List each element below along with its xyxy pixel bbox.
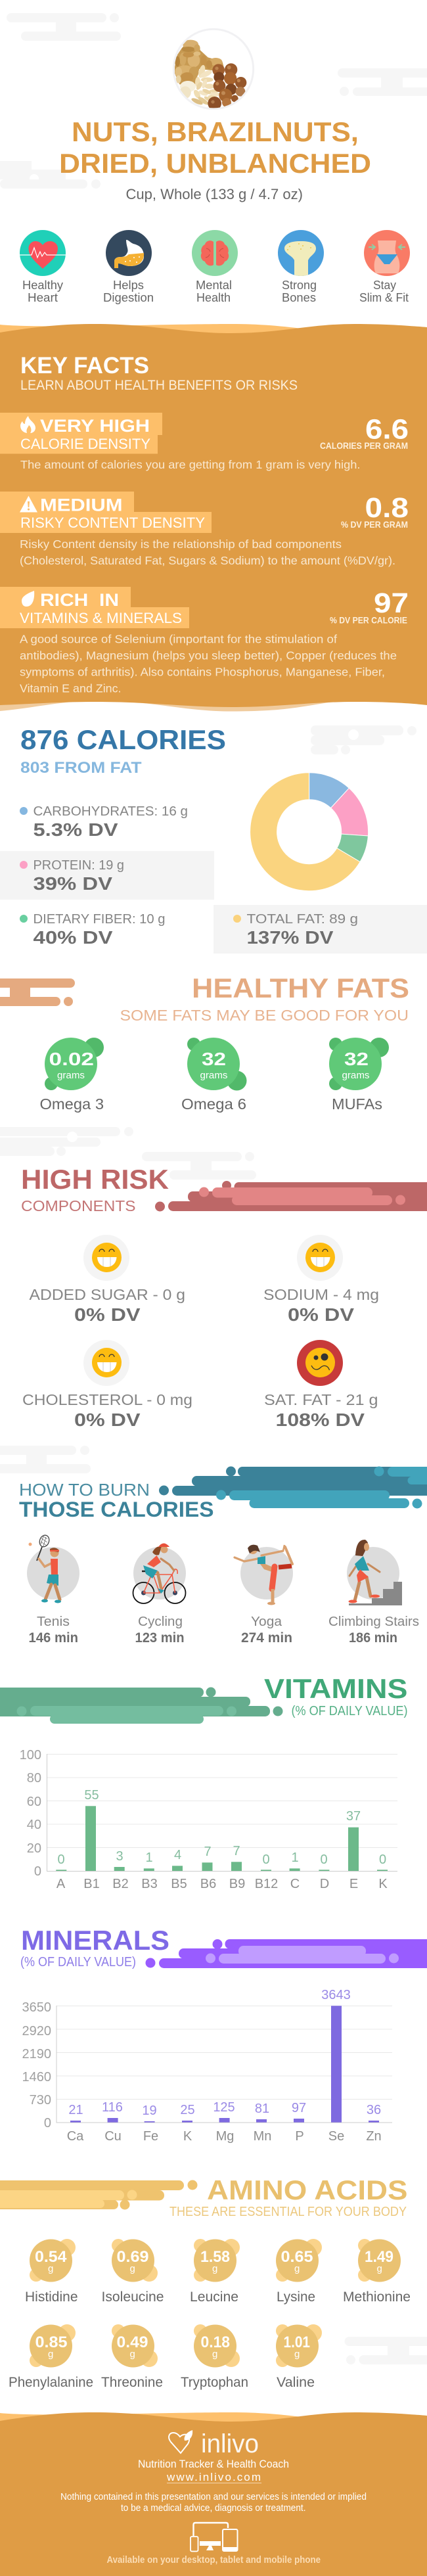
badge: histidine: Histidine bbox=[25, 2289, 78, 2305]
bar chart: minerals: 21 bbox=[68, 2103, 83, 2117]
label: rich in: RICH IN bbox=[40, 590, 119, 610]
label: slim and fit: Slim & Fit bbox=[359, 291, 409, 304]
bar chart: vitamins: 1 bbox=[291, 1851, 299, 1865]
badge: methionine: Methionine bbox=[343, 2289, 411, 2305]
badge: leucine bbox=[190, 2239, 240, 2305]
bar chart: minerals: Ca bbox=[67, 2129, 84, 2144]
badge: phenylalanine bbox=[9, 2324, 93, 2390]
donut chart bbox=[250, 773, 369, 891]
disclaimer: Nothing contained in this presentation and our services is intended or implied bbox=[60, 2492, 367, 2502]
badge: phenylalanine: 0.85 bbox=[35, 2334, 67, 2351]
bar chart: vitamins: C bbox=[290, 1877, 300, 1891]
bar chart: vitamins: 0 bbox=[262, 1852, 270, 1867]
bar chart: vitamins: 0 bbox=[379, 1852, 386, 1867]
title: NUTS, BRAZILNUTS, bbox=[72, 116, 359, 147]
subheading: LEARN ABOUT HEALTH BENEFITS OR RISKS bbox=[20, 378, 298, 393]
panel: vitamins bbox=[0, 1673, 407, 1891]
label: helps digestion: Helps bbox=[113, 279, 144, 292]
bar chart: vitamins: E bbox=[349, 1877, 358, 1891]
bar chart: minerals: Mn bbox=[254, 2129, 271, 2144]
subheading: SOME FATS MAY BE GOOD FOR YOU bbox=[120, 1007, 409, 1024]
subheading: (% OF DAILY VALUE) bbox=[20, 1955, 136, 1969]
logo wordmark: inlivo bbox=[201, 2429, 259, 2458]
fact: calorie density bbox=[0, 413, 409, 471]
bar chart: vitamins: 7 bbox=[204, 1845, 212, 1859]
bar chart: minerals: 2190 bbox=[22, 2047, 51, 2061]
bar chart: vitamins: D bbox=[320, 1877, 329, 1891]
badge: methionine: g bbox=[377, 2263, 382, 2274]
label: helps digestion: Digestion bbox=[103, 291, 154, 304]
subheading: THESE ARE ESSENTIAL FOR YOUR BODY bbox=[169, 2205, 407, 2219]
item: cholesterol: CHOLESTEROL - 0 mg bbox=[22, 1391, 192, 1408]
badge: mufas: 32 bbox=[344, 1049, 369, 1069]
bar chart: minerals: Mg bbox=[216, 2129, 234, 2144]
exercise: cycling: Cycling bbox=[138, 1615, 183, 1629]
bar chart: vitamins: 20 bbox=[27, 1841, 41, 1856]
tagline: Nutrition Tracker & Health Coach bbox=[138, 2458, 289, 2470]
exercise: yoga: Yoga bbox=[251, 1615, 282, 1629]
background cloud: top left bbox=[7, 13, 121, 41]
heading: healthy fats: HEALTHY FATS bbox=[192, 973, 409, 1003]
logo: inlivo heart bbox=[169, 2429, 259, 2458]
background clouds: above high risk bbox=[0, 1127, 256, 1180]
background cloud bbox=[344, 2337, 427, 2364]
panel: footer bbox=[0, 2412, 427, 2576]
bar chart: vitamins: B1 bbox=[83, 1877, 100, 1891]
fact: rich in vitamins and minerals bbox=[0, 587, 409, 695]
icon: flame bbox=[20, 416, 35, 433]
description: Risky Content density is the relationship of bad components bbox=[20, 538, 342, 551]
badge: valine: 1.01 bbox=[284, 2334, 310, 2351]
badge: omega 3: 0.02 bbox=[49, 1049, 94, 1069]
background cloud: beside title bbox=[0, 161, 101, 189]
exercise: yoga bbox=[235, 1545, 293, 1645]
badge: omega 6: grams bbox=[200, 1070, 227, 1081]
badge: leucine: Leucine bbox=[190, 2289, 238, 2305]
panel: minerals bbox=[20, 1925, 427, 2144]
description: The amount of calories you are getting from 1 gram is very high. bbox=[20, 458, 360, 471]
bar chart: vitamins: 100 bbox=[20, 1748, 41, 1762]
exercise: tennis bbox=[27, 1534, 79, 1645]
legend: carbohydrates bbox=[20, 804, 188, 840]
title bbox=[59, 116, 371, 179]
decorative blob bbox=[159, 1467, 427, 1509]
bar chart: minerals: 2920 bbox=[22, 2024, 51, 2038]
panel: high risk components bbox=[21, 1164, 427, 1430]
value: 0.8: 0.8 bbox=[365, 492, 409, 524]
description: Vitamin E and Zinc. bbox=[20, 682, 121, 695]
bar chart: minerals: 0 bbox=[44, 2116, 51, 2130]
description: A good source of Selenium (important for the stimulation of bbox=[20, 632, 337, 645]
icon: warning triangle bbox=[20, 495, 37, 513]
bar chart: vitamins bbox=[20, 1748, 397, 1891]
bar chart: minerals: 25 bbox=[180, 2103, 195, 2117]
badge: leucine: 1.58 bbox=[200, 2248, 230, 2266]
decorative blob bbox=[146, 1939, 427, 1968]
bar chart: minerals: 36 bbox=[367, 2103, 381, 2117]
item: added sugar: ADDED SUGAR - 0 g bbox=[29, 1286, 185, 1303]
title: DRIED, UNBLANCHED bbox=[59, 148, 371, 179]
legend: carbohydrates: 5.3% DV bbox=[33, 819, 118, 840]
exercise: tennis: 146 min bbox=[29, 1630, 78, 1645]
icon: mental health brain bbox=[192, 230, 238, 276]
item: sodium: SODIUM - 4 mg bbox=[263, 1286, 379, 1303]
value: 97: 97 bbox=[374, 587, 409, 619]
background band: protein bbox=[0, 851, 214, 900]
heading: amino acids: AMINO ACIDS bbox=[207, 2174, 407, 2205]
bar chart: vitamins: B12 bbox=[255, 1877, 278, 1891]
legend: protein: PROTEIN: 19 g bbox=[33, 858, 124, 873]
badge: valine bbox=[276, 2324, 322, 2390]
subheading: components: COMPONENTS bbox=[21, 1197, 135, 1214]
exercise: climbing stairs: Climbing Stairs bbox=[328, 1615, 419, 1629]
badge: tryptophan: g bbox=[212, 2349, 217, 2360]
bar chart: vitamins: B5 bbox=[171, 1877, 187, 1891]
legend: dietary fiber: 40% DV bbox=[33, 927, 113, 948]
label: slim and fit: Stay bbox=[373, 279, 396, 292]
badge: omega 3: Omega 3 bbox=[39, 1095, 104, 1113]
unit: dv per gram: % DV PER GRAM bbox=[341, 520, 408, 530]
description bbox=[20, 632, 397, 695]
badge: methionine bbox=[343, 2239, 411, 2305]
description: antibodies), Magnesium (helps you sleep better), Copper (reduces the bbox=[20, 649, 397, 662]
bar chart: minerals: 97 bbox=[292, 2101, 306, 2115]
website link: www.inlivo.com bbox=[166, 2471, 261, 2483]
item: saturated fat bbox=[264, 1340, 378, 1430]
label: healthy heart: Heart bbox=[28, 291, 58, 304]
value: 6.6: 6.6 bbox=[365, 414, 409, 446]
background band: total fat bbox=[214, 905, 427, 954]
bar chart: minerals: K bbox=[183, 2129, 192, 2144]
label: calorie density: CALORIE DENSITY bbox=[20, 436, 150, 452]
badge: isoleucine: Isoleucine bbox=[101, 2289, 164, 2305]
bar chart: vitamins: 4 bbox=[174, 1848, 181, 1862]
badge: valine: Valine bbox=[277, 2375, 315, 2390]
legend: dietary fiber bbox=[20, 912, 165, 948]
badge: mufas: MUFAs bbox=[332, 1095, 382, 1113]
decorative blob bbox=[0, 2180, 197, 2209]
item: cholesterol bbox=[22, 1340, 192, 1430]
bar chart: vitamins: B9 bbox=[229, 1877, 245, 1891]
bar chart: vitamins: B3 bbox=[141, 1877, 158, 1891]
bar chart: minerals: 81 bbox=[255, 2102, 269, 2116]
bar chart: minerals: Fe bbox=[143, 2129, 158, 2144]
unit: dv per calorie: % DV PER CALORIE bbox=[330, 615, 407, 626]
badge: threonine: Threonine bbox=[101, 2375, 163, 2390]
disclaimer: to be a medical advice, diagnosis or treatment. bbox=[121, 2503, 306, 2514]
legend: protein: 39% DV bbox=[33, 873, 112, 894]
subheading: from fat: 803 FROM FAT bbox=[20, 759, 142, 777]
unit: calories per gram: CALORIES PER GRAM bbox=[320, 441, 408, 451]
legend: carbohydrates: CARBOHYDRATES: 16 g bbox=[33, 804, 188, 819]
badge: threonine: g bbox=[130, 2349, 135, 2360]
panel: healthy fats bbox=[0, 973, 409, 1113]
legend: total fat bbox=[233, 912, 358, 948]
bar chart: minerals: 116 bbox=[102, 2100, 123, 2115]
badge: histidine: g bbox=[48, 2263, 53, 2274]
bar chart: minerals: 3643 bbox=[321, 1988, 351, 2002]
badge: tryptophan bbox=[181, 2324, 248, 2390]
label: helps digestion bbox=[103, 279, 154, 304]
heading: minerals: MINERALS bbox=[21, 1925, 169, 1956]
badge: lysine: 0.65 bbox=[281, 2248, 313, 2266]
label: healthy heart: Healthy bbox=[22, 279, 63, 292]
badge: mufas bbox=[329, 1038, 389, 1113]
heading: key facts: KEY FACTS bbox=[20, 353, 149, 379]
badge: threonine: 0.49 bbox=[117, 2334, 148, 2351]
heading bbox=[19, 1480, 214, 1521]
decorative blob bbox=[0, 1688, 282, 1724]
badge: omega 3: grams bbox=[57, 1070, 85, 1081]
badge: lysine: Lysine bbox=[277, 2289, 315, 2305]
icon: digestion stomach bbox=[106, 230, 152, 276]
description: (Cholesterol, Saturated Fat, Sugars & Sodium) to the amount (%DV/gr). bbox=[20, 554, 395, 567]
badge: phenylalanine: g bbox=[48, 2349, 53, 2360]
background cloud: above burn section bbox=[0, 1446, 91, 1473]
badge: omega 3 bbox=[39, 1038, 104, 1113]
description bbox=[20, 538, 395, 567]
badge: omega 6: Omega 6 bbox=[181, 1095, 246, 1113]
label: mental health: Health bbox=[196, 291, 231, 304]
badge: histidine bbox=[25, 2239, 78, 2305]
health benefit icons row bbox=[20, 230, 410, 304]
panel: amino acids bbox=[0, 2174, 427, 2390]
item: added sugar bbox=[29, 1235, 185, 1325]
bar chart: vitamins: 1 bbox=[145, 1851, 153, 1865]
bar chart: minerals: P bbox=[295, 2129, 304, 2144]
availability note: Available on your desktop, tablet and mobile phone bbox=[106, 2554, 321, 2565]
badge: histidine: 0.54 bbox=[35, 2248, 67, 2266]
label: strong bones: Strong bbox=[282, 279, 317, 292]
bar chart: vitamins: B2 bbox=[112, 1877, 129, 1891]
item: added sugar: 0% DV bbox=[74, 1304, 141, 1325]
bar chart: vitamins: 0 bbox=[34, 1864, 41, 1879]
badge: omega 6: 32 bbox=[202, 1049, 226, 1069]
heading: vitamins: VITAMINS bbox=[264, 1673, 407, 1704]
badge: lysine: g bbox=[294, 2263, 300, 2274]
badge: lysine bbox=[276, 2239, 322, 2305]
bar chart: minerals: 125 bbox=[213, 2100, 235, 2115]
serving size subtitle: Cup, Whole (133 g / 4.7 oz) bbox=[126, 186, 303, 202]
badge: threonine bbox=[101, 2324, 163, 2390]
badge: isoleucine: g bbox=[130, 2263, 135, 2274]
bar chart: vitamins: 7 bbox=[233, 1844, 240, 1858]
bar chart: vitamins: 0 bbox=[57, 1852, 65, 1867]
badge: methionine: 1.49 bbox=[365, 2248, 393, 2266]
bar chart: minerals bbox=[22, 1988, 392, 2144]
badge: isoleucine: 0.69 bbox=[117, 2248, 148, 2266]
background cloud: top right bbox=[338, 68, 427, 96]
bar chart: minerals: 1460 bbox=[22, 2070, 51, 2084]
legend: protein bbox=[20, 858, 124, 894]
decorative blob bbox=[155, 1181, 427, 1212]
item: sodium: 0% DV bbox=[288, 1304, 354, 1325]
panel: calories bbox=[0, 724, 427, 954]
item: saturated fat: SAT. FAT - 21 g bbox=[264, 1391, 378, 1408]
bar chart: vitamins: K bbox=[378, 1877, 388, 1891]
badge: leucine: g bbox=[212, 2263, 217, 2274]
label: risky content density: RISKY CONTENT DENSITY bbox=[20, 515, 205, 531]
badge: tryptophan: 0.18 bbox=[201, 2334, 230, 2351]
heading: calories: 876 CALORIES bbox=[20, 724, 226, 755]
bar chart: vitamins: 37 bbox=[346, 1809, 361, 1824]
exercise: yoga: 274 min bbox=[241, 1630, 292, 1645]
icon: healthy heart bbox=[20, 230, 66, 276]
subheading: (% OF DAILY VALUE) bbox=[292, 1704, 407, 1718]
badge: omega 6 bbox=[181, 1038, 247, 1113]
bar chart: vitamins: 55 bbox=[84, 1788, 99, 1803]
legend: dietary fiber: DIETARY FIBER: 10 g bbox=[33, 912, 165, 927]
item: cholesterol: 0% DV bbox=[74, 1410, 141, 1430]
heading: HOW TO BURN bbox=[19, 1480, 150, 1500]
label: medium: MEDIUM bbox=[40, 495, 122, 515]
bar chart: minerals: Zn bbox=[366, 2129, 382, 2144]
food photo: mixed nuts bbox=[173, 29, 254, 110]
bar chart: vitamins: 60 bbox=[27, 1795, 41, 1809]
bar chart: minerals: 3650 bbox=[22, 2000, 51, 2015]
label: strong bones bbox=[282, 279, 317, 304]
bar chart: vitamins: 80 bbox=[27, 1771, 41, 1785]
label: mental health bbox=[196, 279, 232, 304]
icon: devices bbox=[191, 2523, 238, 2551]
exercise: tennis: Tenis bbox=[37, 1615, 70, 1629]
exercise: climbing stairs: 186 min bbox=[349, 1630, 397, 1645]
label: healthy heart bbox=[22, 279, 63, 304]
legend: total fat: TOTAL FAT: 89 g bbox=[247, 912, 358, 927]
item: sodium bbox=[263, 1235, 379, 1325]
bar chart: vitamins: A bbox=[56, 1877, 66, 1891]
heading: THOSE CALORIES bbox=[19, 1498, 214, 1521]
bar chart: minerals: Se bbox=[328, 2129, 344, 2144]
exercise: cycling: 123 min bbox=[135, 1630, 184, 1645]
legend: total fat: 137% DV bbox=[247, 927, 334, 948]
bar chart: minerals: Cu bbox=[104, 2129, 122, 2144]
icon: strong bones bbox=[278, 230, 324, 279]
label: strong bones: Bones bbox=[282, 291, 316, 304]
bar chart: minerals: 19 bbox=[142, 2104, 157, 2118]
heading: high risk: HIGH RISK bbox=[21, 1164, 169, 1195]
bar chart: minerals: 730 bbox=[30, 2093, 51, 2107]
background cloud bbox=[311, 725, 416, 754]
description: symptoms of arthritis). Also contains Phosphorus, Manganese, Fiber, bbox=[20, 665, 385, 678]
icon: leaf bbox=[22, 591, 34, 607]
exercise: cycling bbox=[133, 1543, 186, 1645]
label: slim and fit bbox=[359, 279, 409, 304]
badge: mufas: grams bbox=[342, 1070, 369, 1081]
fact: risky content density bbox=[0, 492, 409, 567]
bar chart: vitamins: B6 bbox=[200, 1877, 216, 1891]
decorative blob bbox=[0, 978, 75, 1006]
badge: isoleucine bbox=[101, 2239, 164, 2305]
label: vitamins and minerals: VITAMINS & MINERALS bbox=[20, 610, 182, 626]
panel: key facts bbox=[0, 324, 427, 711]
icon: slim and fit bbox=[364, 230, 410, 276]
bar chart: vitamins: 0 bbox=[320, 1852, 328, 1867]
badge: valine: g bbox=[294, 2349, 300, 2360]
bar chart: vitamins: 40 bbox=[27, 1818, 41, 1832]
panel: how to burn those calories bbox=[19, 1467, 427, 1645]
badge: tryptophan: Tryptophan bbox=[181, 2375, 248, 2390]
disclaimer bbox=[60, 2492, 367, 2514]
label: very high: VERY HIGH bbox=[40, 416, 150, 436]
exercise: climbing stairs bbox=[328, 1540, 419, 1645]
badge: phenylalanine: Phenylalanine bbox=[9, 2375, 93, 2390]
item: saturated fat: 108% DV bbox=[276, 1410, 365, 1430]
label: mental health: Mental bbox=[196, 279, 232, 292]
bar chart: vitamins: 3 bbox=[116, 1849, 124, 1864]
